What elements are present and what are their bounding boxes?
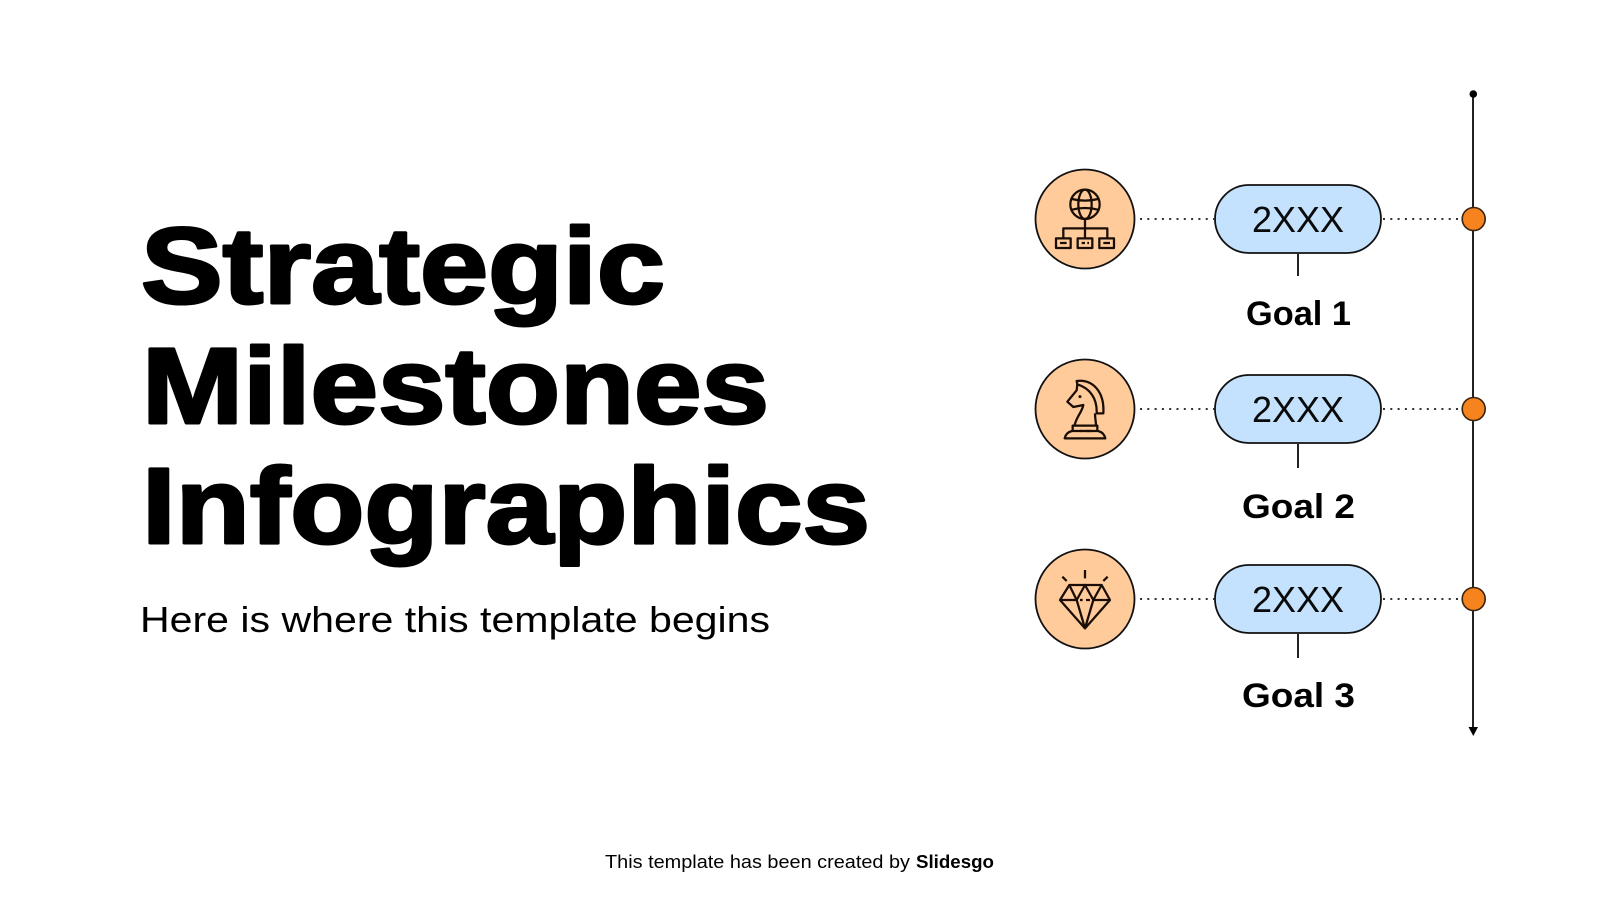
year pill: 2XXX: [1252, 389, 1344, 430]
connector dots: [1140, 408, 1462, 410]
icon: diamond: [1036, 550, 1134, 648]
year pill: [1215, 375, 1381, 443]
year pill: 2XXX: [1252, 579, 1344, 620]
timeline node: [1462, 208, 1485, 230]
icon: globe network: [1036, 170, 1134, 268]
title: Milestones: [142, 325, 769, 446]
panel: goal 2 row: [1036, 360, 1485, 526]
footer credit: This template has been created by: [605, 851, 911, 872]
connector dots: [1140, 598, 1462, 600]
stem: [1297, 444, 1299, 468]
timeline axis arrow: [1468, 90, 1478, 736]
footer credit: Slidesgo: [916, 851, 994, 872]
timeline node: [1462, 588, 1485, 610]
title: [141, 205, 870, 566]
panel: goal 3 row: [1036, 550, 1485, 715]
year pill: [1215, 565, 1381, 633]
stem: [1297, 634, 1299, 658]
title: Strategic: [141, 205, 665, 326]
panel: goal 1 row: [1036, 170, 1485, 333]
title: Infographics: [142, 445, 870, 566]
icon: chess knight: [1036, 360, 1134, 458]
goal label: Goal 2: [1242, 488, 1355, 526]
year pill: [1215, 185, 1381, 253]
goal label: Goal 3: [1242, 677, 1355, 715]
stem: [1297, 254, 1299, 276]
subtitle: Here is where this template begins: [140, 599, 770, 640]
connector dots: [1140, 218, 1462, 220]
goal label: Goal 1: [1246, 295, 1351, 333]
year pill: 2XXX: [1252, 199, 1344, 240]
timeline node: [1462, 398, 1485, 420]
